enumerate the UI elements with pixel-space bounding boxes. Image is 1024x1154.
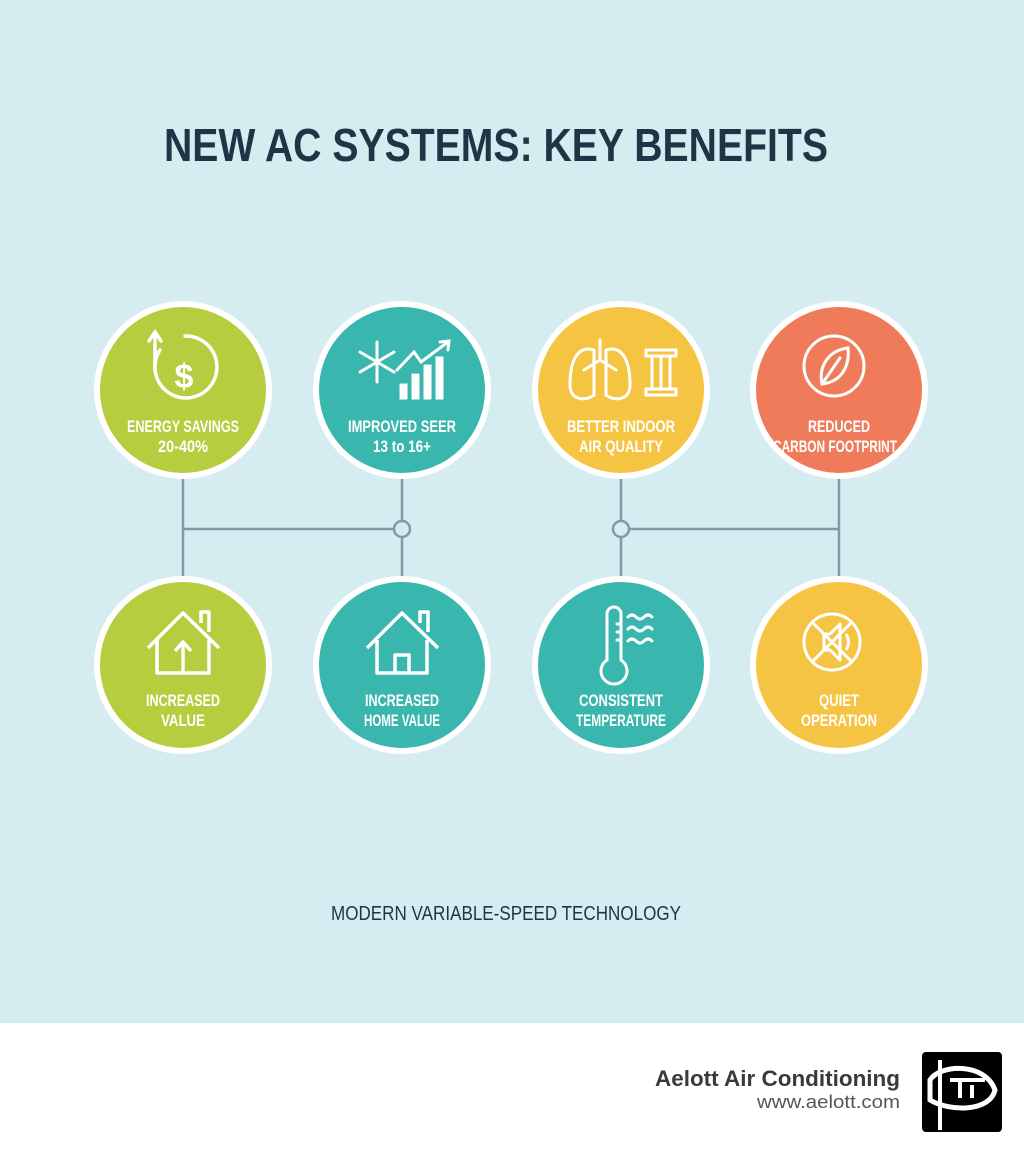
- circle: increased value: VALUE: [161, 711, 205, 730]
- circle: increased value: INCREASED: [146, 691, 220, 710]
- circle: indoor air quality: BETTER INDOOR: [567, 417, 675, 436]
- circle: quiet operation: OPERATION: [801, 711, 877, 730]
- title: NEW AC SYSTEMS: KEY BENEFITS: [164, 119, 828, 171]
- circle: improved SEER: 13 to 16+: [373, 437, 431, 456]
- circle: consistent temperature: CONSISTENT: [579, 691, 663, 710]
- circle: consistent temperature: [535, 579, 707, 751]
- circle: carbon footprint: REDUCED: [808, 417, 870, 436]
- logo: [922, 1052, 1002, 1132]
- icon: dollar cycle: [149, 332, 217, 398]
- footer brand: [655, 1066, 900, 1112]
- circle: carbon footprint: [753, 304, 925, 476]
- circle: increased home value: INCREASED: [365, 691, 439, 710]
- circle: energy savings: [97, 304, 269, 476]
- circle: quiet operation: QUIET: [819, 691, 859, 710]
- circle: quiet operation: [753, 579, 925, 751]
- icon: lungs and filter: [570, 340, 676, 399]
- circle: consistent temperature: TEMPERATURE: [576, 711, 666, 730]
- connectors: [183, 478, 839, 577]
- circle: carbon footprint: CARBON FOOTPRINT: [773, 437, 897, 456]
- icon: house with arrow: [148, 612, 219, 673]
- circle: energy savings: ENERGY SAVINGS: [127, 417, 239, 436]
- footer brand: www.aelott.com: [756, 1092, 900, 1112]
- circle: increased value: [97, 579, 269, 751]
- circle: increased home value: [316, 579, 488, 751]
- circle: energy savings: 20-40%: [158, 437, 208, 456]
- icon: house: [367, 612, 438, 673]
- circle: improved SEER: [316, 304, 488, 476]
- circle: indoor air quality: [535, 304, 707, 476]
- circle: improved SEER: IMPROVED SEER: [348, 417, 456, 436]
- icon: snowflake and chart: [360, 341, 449, 398]
- circle: increased home value: HOME VALUE: [364, 711, 440, 730]
- icon: leaf: [804, 336, 864, 396]
- circle: indoor air quality: AIR QUALITY: [579, 437, 664, 456]
- footer brand: Aelott Air Conditioning: [655, 1066, 900, 1091]
- subtitle: MODERN VARIABLE-SPEED TECHNOLOGY: [331, 903, 681, 925]
- icon: muted speaker: [804, 614, 860, 670]
- icon: dollar cycle: $: [175, 358, 194, 396]
- icon: thermometer with waves: [601, 607, 652, 684]
